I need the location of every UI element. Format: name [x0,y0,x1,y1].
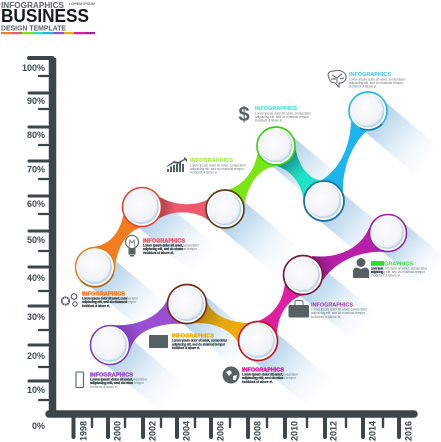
body text: incididunt ut labore et. [255,118,283,122]
percentage labels: 90% [27,96,45,106]
body text: incididunt ut labore et. [90,385,118,389]
body text: adipiscing elit, sed do eiusmod tempor [82,300,137,304]
node: 2000 purple [90,326,130,364]
body text: Lorem ipsum dolor sit amet, consectetur [90,378,148,382]
icon: globe [222,366,240,384]
callout: purple [76,372,148,389]
callout: green [167,157,247,174]
percentage labels: 10% [27,385,45,395]
body text [371,266,428,278]
callout: lime person [353,258,428,278]
heading: INFOGRAPHICS [143,238,185,244]
node: 2006 brown [206,190,244,228]
callout: orange [61,292,139,308]
callout: teal [238,104,312,126]
year labels: 2002 [148,421,158,441]
body text: Lorem ipsum dolor sit amet, consectetur [143,244,200,248]
body text: adipiscing elit, sed do eiusmod tempor [255,115,310,119]
heading: INFOGRAPHICS [90,372,133,378]
body text: Lorem ipsum dolor sit amet, consectetur [255,112,312,116]
node: 2008 crimson [238,322,278,360]
callout: cyan [328,70,406,88]
node: 2010 maroon [284,256,322,294]
body text: Lorem ipsum dolor sit amet, [242,372,283,376]
node: 2002 red [122,188,162,226]
body text: adipiscing elit, sed do eiusmod tempor [172,342,226,346]
body text: incididunt ut labore et. [190,170,218,174]
year labels: 2008 [252,421,262,441]
header title block [1,0,95,34]
body text: adipiscing elit, sed do eiusmod tempor [371,270,426,274]
node: 1998 orange [76,248,114,287]
body text [172,338,228,350]
heading: INFOGRAPHICS [371,262,413,268]
node: 2014 cyan [349,92,387,130]
node: 2012 blue [304,181,344,221]
body text: adipiscing elit, sed do eius [90,381,133,385]
body text: adipiscing elit, sed do eiusmod tempor [143,247,198,251]
body text [255,112,312,122]
icon: dollar: $ [238,104,250,126]
body text: adipiscing elit, sed do eiusmod tempor [242,376,297,380]
body text: incididunt ut labore et. [143,251,174,255]
body text: Lorem ipsum dolor sit amet, consectetur [82,296,139,300]
body text: adipiscing elit, sed do eius [242,376,283,380]
heading: INFOGRAPHICS [311,302,353,308]
percentage labels: 70% [27,164,45,174]
year labels: 2012 [328,421,338,441]
body text: Lorem ipsum dolor sit amet, consectetur [349,78,406,82]
heading: infographics: INFOGRAPHICS [1,0,64,10]
body text: incididunt ut labore et. [242,380,273,384]
heading: INFOGRAPHICS [255,106,297,112]
heading: INFOGRAPHICS [172,334,214,340]
body text: Lorem ipsum dolor sit amet, consectetur [311,308,368,312]
node: 2015 violet [370,214,406,252]
long shadows [83,97,441,415]
rainbow strip [1,32,95,34]
body text: adipiscing elit, sed do eiusmod tempor [311,311,366,315]
body text [90,378,148,389]
heading: INFOGRAPHICS [242,368,284,374]
year labels: 2014 [368,421,378,441]
year labels: 2006 [216,421,226,441]
icon: gears [61,294,77,306]
body text: adipiscing elit, sed do eiusmod tempor [349,81,404,85]
percentage labels: 40% [27,273,45,283]
year labels: 2004 [182,421,192,441]
callout: coral [126,236,200,256]
body text: adipiscing elit, sed do eiusmod tempor [190,167,245,171]
body text: Lorem ipsum dolor sit amet, [90,378,133,382]
body text: incididunt ut labore et. [82,304,110,308]
body text: incididunt ut labore et. [349,84,377,88]
y axis [29,58,52,414]
heading: business: BUSINESS [1,6,89,26]
icon: phone [76,372,84,388]
tag: lorem ipsum: LOREM IPSUM [69,2,95,6]
body text: Lorem ipsum dolor sit amet, consectetur [172,338,228,342]
body text [190,164,247,174]
heading: INFOGRAPHICS [190,158,233,164]
callout: magenta [222,366,299,384]
icon: light bulb [126,236,138,256]
percentage labels: 100% [22,63,45,73]
body text: Lorem ipsum dolor sit amet, [143,244,183,248]
year labels: 1998 [78,421,88,441]
icon: person [353,258,369,278]
x axis [49,414,414,437]
percentage labels: 60% [27,199,45,209]
body text: adipiscing elit, sed do eiusmod tempor [90,381,145,385]
year labels: 2010 [290,421,300,441]
axes [22,58,414,441]
body text [349,78,406,88]
body text: Lorem ipsum dolor sit amet, consectetur [371,266,428,270]
subheading: design template: DESIGN TEMPLATE [1,26,66,32]
body text: Lorem ipsum dolor sit amet, consectetur [190,164,247,168]
body text: incididunt ut labore et. [172,346,200,350]
callout: violet [288,300,368,319]
lower timeline connectors [110,228,385,350]
body text: adipiscing [371,270,383,274]
body text [82,296,139,308]
percentage labels: 0% [32,421,45,431]
percentage labels: 50% [27,235,45,245]
percentage labels: 80% [27,130,45,140]
body text: incididunt ut labore et. [371,274,401,278]
year labels [78,421,414,441]
node: 2004 dark red [168,284,206,324]
icon: slate rectangle [149,335,168,348]
heading: INFOGRAPHICS [82,292,125,298]
icon: bar chart [167,157,187,172]
body text: Lorem ipsum dolor sit amet, cons [82,296,127,300]
year labels: 2000 [112,421,122,441]
body text: incididunt ut labore et. [311,315,341,319]
body text: Lorem ipsum dolor sit amet, consectetur [242,372,299,376]
body text [143,244,200,255]
node: 2009 green [257,127,295,165]
body text: adipiscing elit, sed do eiusm [143,247,183,251]
body text: Lorem ipsum [371,266,383,270]
body text [311,308,368,319]
icon: brain [328,70,346,87]
body text: adipiscing elit, sed do eiusmod [82,300,127,304]
percentage labels: 30% [27,312,45,322]
icon: briefcase [288,300,309,318]
percentage labels [22,63,45,431]
percentage labels: 20% [27,351,45,361]
callout: gold [149,334,228,350]
upper timeline connectors [93,122,368,272]
heading: INFOGRAPHICS [349,72,391,78]
year labels: 2016 [404,421,414,441]
body text [242,372,299,384]
